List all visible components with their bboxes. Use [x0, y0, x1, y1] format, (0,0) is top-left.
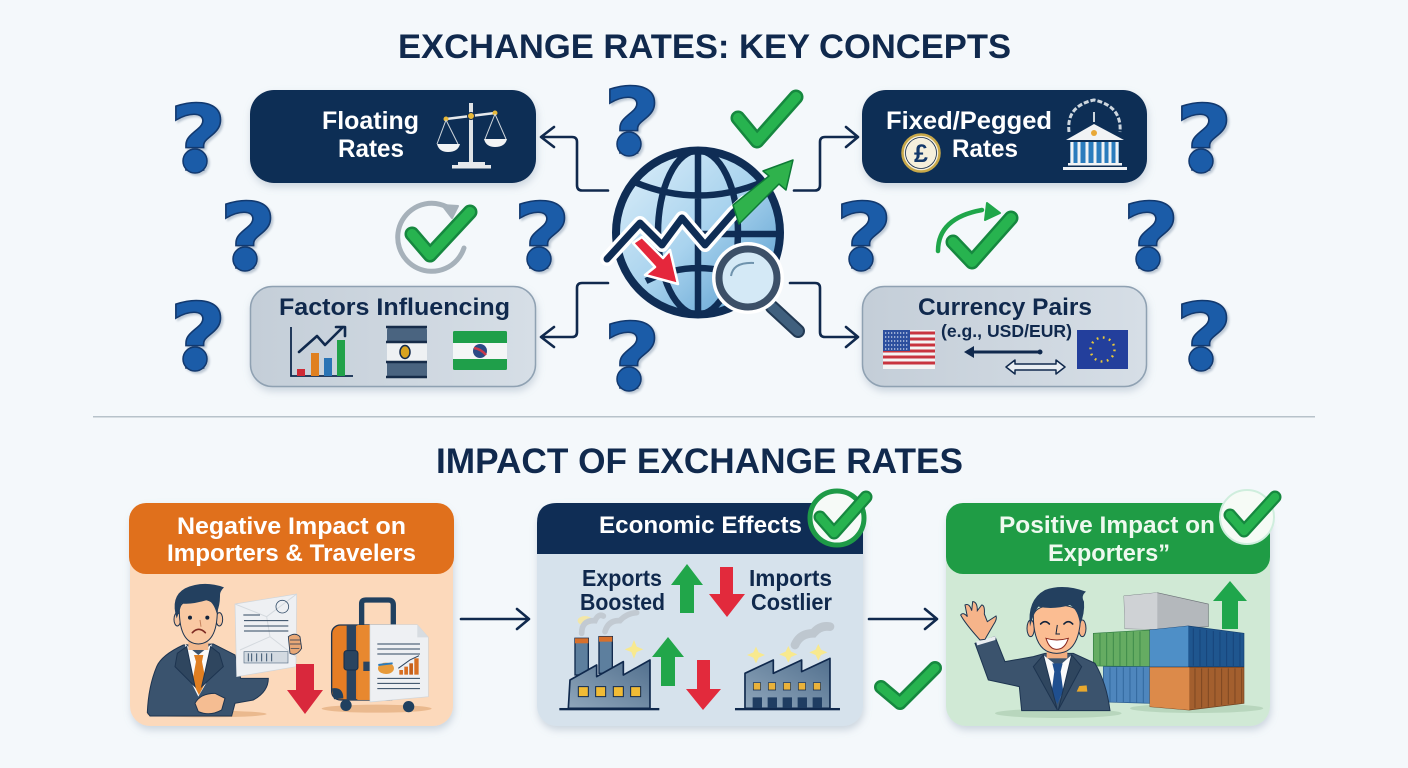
panel: economic effects	[537, 491, 866, 726]
imports costlier text: Costlier	[751, 589, 832, 615]
positive impact label	[999, 512, 1215, 567]
arrow: lower down	[686, 660, 721, 710]
panel: floating rates	[250, 90, 536, 183]
section heading: impact: IMPACT OF EXCHANGE RATES	[436, 442, 963, 481]
floating rates label: Floating	[322, 107, 419, 135]
question marks: ?	[219, 185, 277, 290]
title: EXCHANGE RATES: KEY CONCEPTS	[398, 28, 1011, 66]
panel: currency pairs	[862, 286, 1146, 386]
negative impact label	[167, 513, 416, 567]
question marks: ?	[603, 305, 661, 410]
fixed/pegged label	[886, 107, 1052, 163]
red down arrow	[633, 237, 678, 284]
icon: flag	[453, 331, 507, 370]
icon: refresh check left	[398, 203, 470, 271]
arrow: exports up	[671, 564, 703, 613]
arrow: economic to positive	[869, 609, 937, 629]
arrow: negative to economic	[461, 609, 529, 629]
positive impact label: Positive Impact on	[999, 512, 1215, 539]
question marks: ?	[169, 285, 227, 390]
question marks: ?	[835, 185, 893, 290]
economic effects header	[537, 503, 863, 554]
arrow: globe to floating rates	[541, 127, 608, 190]
panel: factors influencing	[250, 286, 536, 386]
fixed/pegged label: Fixed/Pegged	[886, 107, 1052, 135]
question marks: ?	[513, 185, 571, 290]
icon: oil barrel	[386, 327, 427, 378]
negative impact header	[129, 503, 454, 574]
globe	[616, 150, 781, 315]
arrow: globe to currency pairs	[790, 283, 858, 347]
icon: factory right	[735, 626, 840, 710]
icon: growth bar chart	[291, 327, 353, 376]
icon: refresh check right	[938, 203, 1011, 262]
divider	[93, 416, 1315, 418]
illustration: crumpled document	[235, 594, 302, 677]
positive impact header	[946, 503, 1270, 574]
currency pairs heading: Currency Pairs	[918, 294, 1092, 321]
arrow: lower up	[652, 637, 684, 686]
icon: us flag	[883, 330, 935, 369]
factors label: Factors Influencing	[279, 294, 510, 321]
imports costlier text	[749, 565, 832, 615]
floating rates label	[322, 107, 419, 163]
panel: positive impact	[946, 490, 1275, 726]
arrow: exchange both ways	[1006, 360, 1065, 374]
icon: balance scales	[437, 103, 507, 168]
icon: factory left	[559, 613, 659, 710]
economic effects label: Economic Effects	[599, 512, 802, 539]
imports costlier text: Imports	[749, 565, 832, 591]
question marks: ?	[603, 70, 661, 175]
zigzag trend line	[607, 202, 745, 259]
exports boosted text: Exports	[582, 565, 662, 591]
panel: negative impact	[129, 503, 454, 726]
question marks	[169, 70, 1233, 410]
illustration: suitcase with document	[322, 600, 432, 713]
green up arrow	[733, 160, 793, 224]
illustration: red down arrow	[287, 664, 323, 714]
question marks: ?	[1122, 185, 1180, 290]
exports boosted text: Boosted	[580, 589, 665, 615]
icon: top check mark	[738, 97, 796, 141]
panel: fixed/pegged rates	[862, 90, 1147, 183]
positive impact label: Exporters”	[1048, 540, 1170, 567]
exports boosted text	[580, 565, 665, 615]
floating rates label: Rates	[338, 135, 404, 163]
currency pairs example: (e.g., USD/EUR)	[941, 321, 1072, 341]
icon: pound coin: £	[914, 140, 928, 168]
icon: economic check badge	[810, 491, 866, 545]
arrow: globe to factors	[541, 283, 608, 347]
icon: positive check badge	[1220, 490, 1275, 544]
negative impact label: Importers & Travelers	[167, 540, 416, 567]
magnifier	[712, 242, 798, 331]
arrow: exchange left	[964, 346, 1042, 358]
arrow: globe to fixed rates	[794, 127, 858, 190]
negative impact label: Negative Impact on	[177, 513, 406, 540]
question marks: ?	[1175, 87, 1233, 192]
arrow: imports down	[709, 567, 745, 617]
icon: eu flag	[1077, 330, 1128, 369]
arrow: exports up	[1213, 581, 1247, 629]
illustration: happy businessman	[961, 587, 1122, 718]
question marks: ?	[169, 87, 227, 192]
question marks: ?	[1175, 285, 1233, 390]
icon: bottom check mark	[881, 668, 935, 703]
icon: pound coin	[902, 134, 940, 172]
icon: bank with chain	[1063, 100, 1127, 170]
fixed/pegged label: Rates	[952, 135, 1018, 163]
illustration: shipping containers	[1093, 593, 1263, 713]
icon: globe with trend arrows and magnifier	[607, 150, 798, 331]
illustration: worried businessman	[147, 584, 268, 717]
